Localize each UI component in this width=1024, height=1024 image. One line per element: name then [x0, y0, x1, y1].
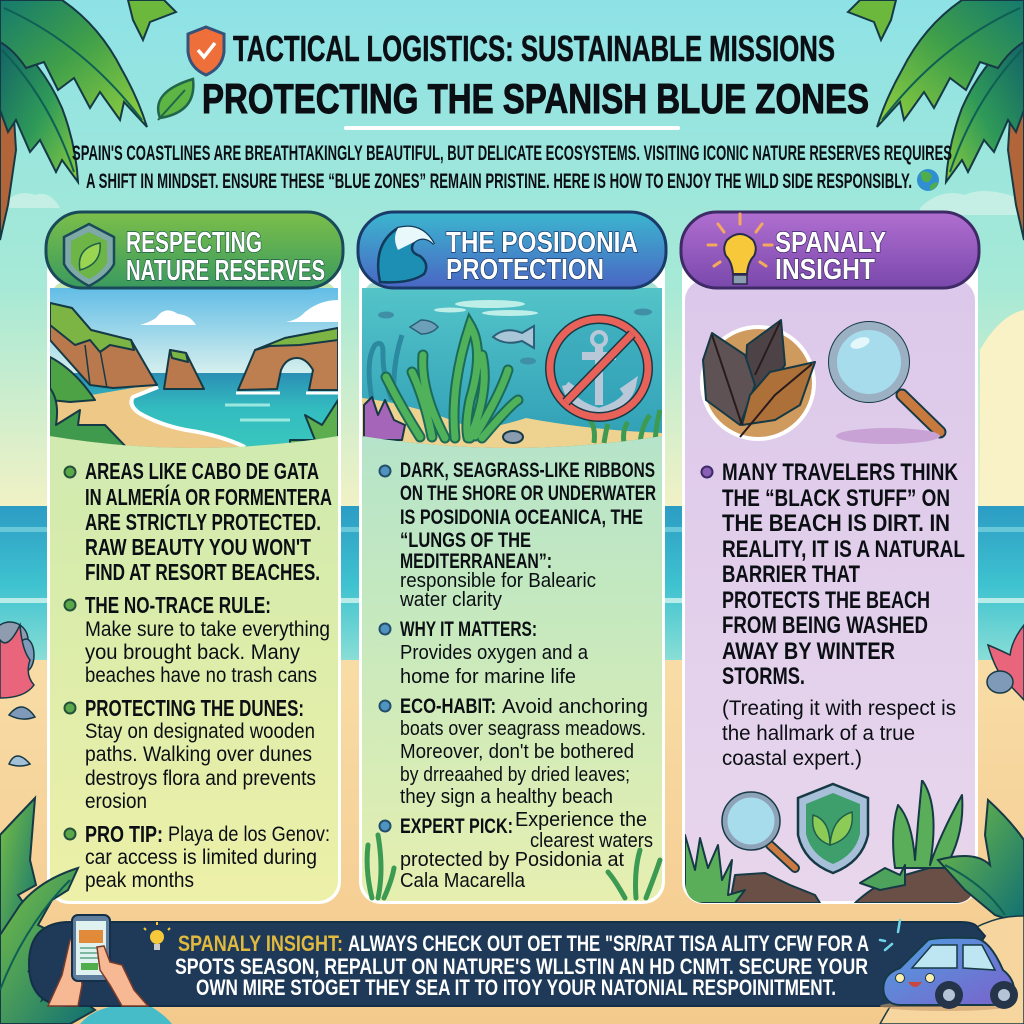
panel text: respecting nature reserves: destroys flora and prevents — [85, 767, 316, 790]
icon: magnifying glass — [829, 322, 940, 432]
banner text: SPOTS SEASON, REPALUT ON NATURE'S WLLSTIN AN HD CNMT. SECURE YOUR — [175, 954, 868, 979]
panel text: respecting nature reserves: Playa de los Genov: — [168, 823, 330, 846]
panel text: respecting nature reserves: FIND AT RESORT BEACHES. — [85, 559, 320, 585]
sand mound — [880, 916, 1024, 1024]
banner text — [175, 931, 869, 1000]
header pill: the posidonia protection: THE POSIDONIA — [446, 227, 638, 259]
panel text: the posidonia protection: protected by Posidonia at — [400, 849, 624, 871]
header pill: respecting nature reserves: RESPECTING — [126, 227, 262, 259]
panel text: the posidonia protection: ON THE SHORE OR UNDERWATER — [400, 482, 656, 505]
panel text: the posidonia protection: water clarity — [399, 589, 502, 611]
coral and rocks: right shore — [987, 625, 1024, 700]
icon: globe — [917, 169, 939, 191]
header pill: spanaly insight: INSIGHT — [775, 254, 875, 286]
scene: seagrass meadow with no-anchor sign — [362, 288, 662, 463]
header pill: the posidonia protection: PROTECTION — [446, 254, 604, 286]
panel text: spanaly insight: THE “BLACK STUFF” ON — [722, 485, 950, 512]
panel text: the posidonia protection: MEDITERRANEAN”: — [400, 550, 552, 573]
panel text: spanaly insight: THE BEACH IS DIRT. IN — [722, 510, 950, 537]
panel text: respecting nature reserves — [64, 458, 332, 892]
panel text: respecting nature reserves: you brought back. Many — [85, 641, 300, 664]
banner text: ALWAYS CHECK OUT OET THE "SR/RAT TISA ALITY CFW FOR A — [348, 931, 869, 956]
panel text: the posidonia protection: “LUNGS OF THE — [400, 529, 531, 552]
panel text: spanaly insight: BARRIER THAT — [722, 561, 860, 588]
icon: orange shield — [188, 27, 224, 75]
coral and rocks: left shore — [0, 622, 35, 766]
panel text: the posidonia protection: clearest waters — [530, 830, 653, 852]
panel text: respecting nature reserves: car access is limited during — [85, 846, 317, 869]
panel text: respecting nature reserves: RAW BEAUTY YOU WON'T — [85, 534, 311, 560]
icon: green shield with leaves — [798, 784, 868, 873]
icon: light bulb — [708, 214, 772, 284]
header pill: spanaly insight — [681, 212, 979, 288]
bottom banner — [29, 915, 985, 1006]
panel text: the posidonia protection: Provides oxygen and a — [400, 642, 589, 664]
panel text: respecting nature reserves: PROTECTING THE DUNES: — [85, 695, 304, 721]
banner text: OWN MIRE STOGET THEY SEA IT TO ITOY YOUR NATONIAL RESPOINITMENT. — [196, 975, 836, 1000]
palm fronds: bottom left — [0, 798, 95, 1024]
header pill: respecting nature reserves — [46, 212, 343, 288]
water corner — [80, 1005, 172, 1024]
panel text: respecting nature reserves: IN ALMERÍA OR FORMENTERA — [85, 483, 332, 510]
palm frond: bottom right — [938, 800, 1024, 925]
panel text: the posidonia protection: home for marine life — [400, 666, 576, 688]
panel text: spanaly insight: REALITY, IT IS A NATURAL — [722, 536, 965, 563]
panel: spanaly insight — [682, 250, 978, 904]
panel text: respecting nature reserves: beaches have no trash cans — [85, 664, 317, 687]
header pill: the posidonia protection — [358, 212, 666, 288]
icon: leaf shield — [64, 224, 114, 286]
panel text: the posidonia protection: they sign a healthy beach — [400, 786, 613, 808]
panel text: the posidonia protection: Moreover, don't be bothered — [400, 741, 634, 763]
panel text: the posidonia protection: boats over seagrass meadows. — [400, 718, 646, 740]
title divider — [344, 126, 680, 130]
small magnifying glass — [722, 792, 795, 868]
panel text: respecting nature reserves: AREAS LIKE CABO DE GATA — [85, 458, 319, 484]
scene: coastal nature reserve — [49, 288, 338, 463]
panel text: the posidonia protection: DARK, SEAGRASS-LIKE RIBBONS — [400, 459, 655, 482]
panel text: spanaly insight: coastal expert.) — [722, 747, 862, 770]
panel text: the posidonia protection: EXPERT PICK: — [400, 815, 513, 838]
panel text: respecting nature reserves: Make sure to take everything — [85, 618, 330, 641]
panel: respecting nature reserves — [47, 250, 341, 904]
panel text: spanaly insight: STORMS. — [722, 663, 805, 690]
panel text: the posidonia protection: responsible for Balearic — [400, 570, 596, 592]
panel: the posidonia protection — [359, 250, 665, 904]
header pill: spanaly insight: SPANALY — [775, 227, 886, 259]
icon: hand holding phone — [48, 915, 148, 1006]
panel text: respecting nature reserves: peak months — [85, 869, 194, 892]
panel text: spanaly insight: MANY TRAVELERS THINK — [722, 459, 959, 486]
panel text: respecting nature reserves: paths. Walking over dunes — [85, 743, 312, 766]
shadow under magnifying glass — [836, 428, 940, 444]
panel text: the posidonia protection: by drreaahed by dried leaves; — [400, 764, 630, 786]
panel text: spanaly insight: PROTECTS THE BEACH — [722, 587, 930, 614]
icon: green leaf — [158, 79, 193, 120]
panel text: the posidonia protection: IS POSIDONIA OCEANICA, THE — [400, 506, 643, 529]
palm tree: top left — [0, 0, 176, 240]
panel text: the posidonia protection: Avoid anchoring — [502, 696, 648, 718]
panel text: respecting nature reserves: Stay on designated wooden — [85, 720, 315, 743]
panel text: the posidonia protection: Experience the — [515, 809, 647, 831]
panel text: respecting nature reserves: THE NO-TRACE RULE: — [85, 592, 271, 618]
panel text: the posidonia protection — [380, 459, 656, 892]
intro text — [72, 142, 952, 193]
panel text: spanaly insight: FROM BEING WASHED — [722, 612, 928, 639]
banner text: SPANALY INSIGHT: — [178, 931, 343, 956]
panel text: the posidonia protection: ECO-HABIT: — [400, 695, 496, 718]
panel text: spanaly insight — [702, 459, 965, 770]
palm tree: top right — [848, 0, 1024, 240]
seagrass tufts at panel foot — [367, 835, 660, 898]
panel text: respecting nature reserves: ARE STRICTLY PROTECTED. — [85, 509, 321, 535]
panel text: respecting nature reserves: erosion — [85, 790, 147, 813]
icon: smiling blue car — [880, 920, 1018, 1011]
panel text: spanaly insight: (Treating it with respect is — [722, 697, 956, 720]
panel text: respecting nature reserves: PRO TIP: — [85, 821, 163, 847]
icon: small light bulb — [144, 922, 170, 950]
panel text: spanaly insight: AWAY BY WINTER — [722, 638, 895, 665]
icon: dried posidonia leaves — [702, 320, 815, 439]
foreground soil and plants — [685, 780, 975, 903]
icon: wave — [378, 227, 434, 282]
panel text: spanaly insight: the hallmark of a true — [722, 722, 915, 745]
header pill: respecting nature reserves: NATURE RESERVES — [126, 255, 325, 287]
panel text: the posidonia protection: WHY IT MATTERS: — [400, 618, 537, 641]
panel text: the posidonia protection: Cala Macarella — [400, 870, 526, 892]
icon: crossed-out anchor — [550, 319, 648, 417]
